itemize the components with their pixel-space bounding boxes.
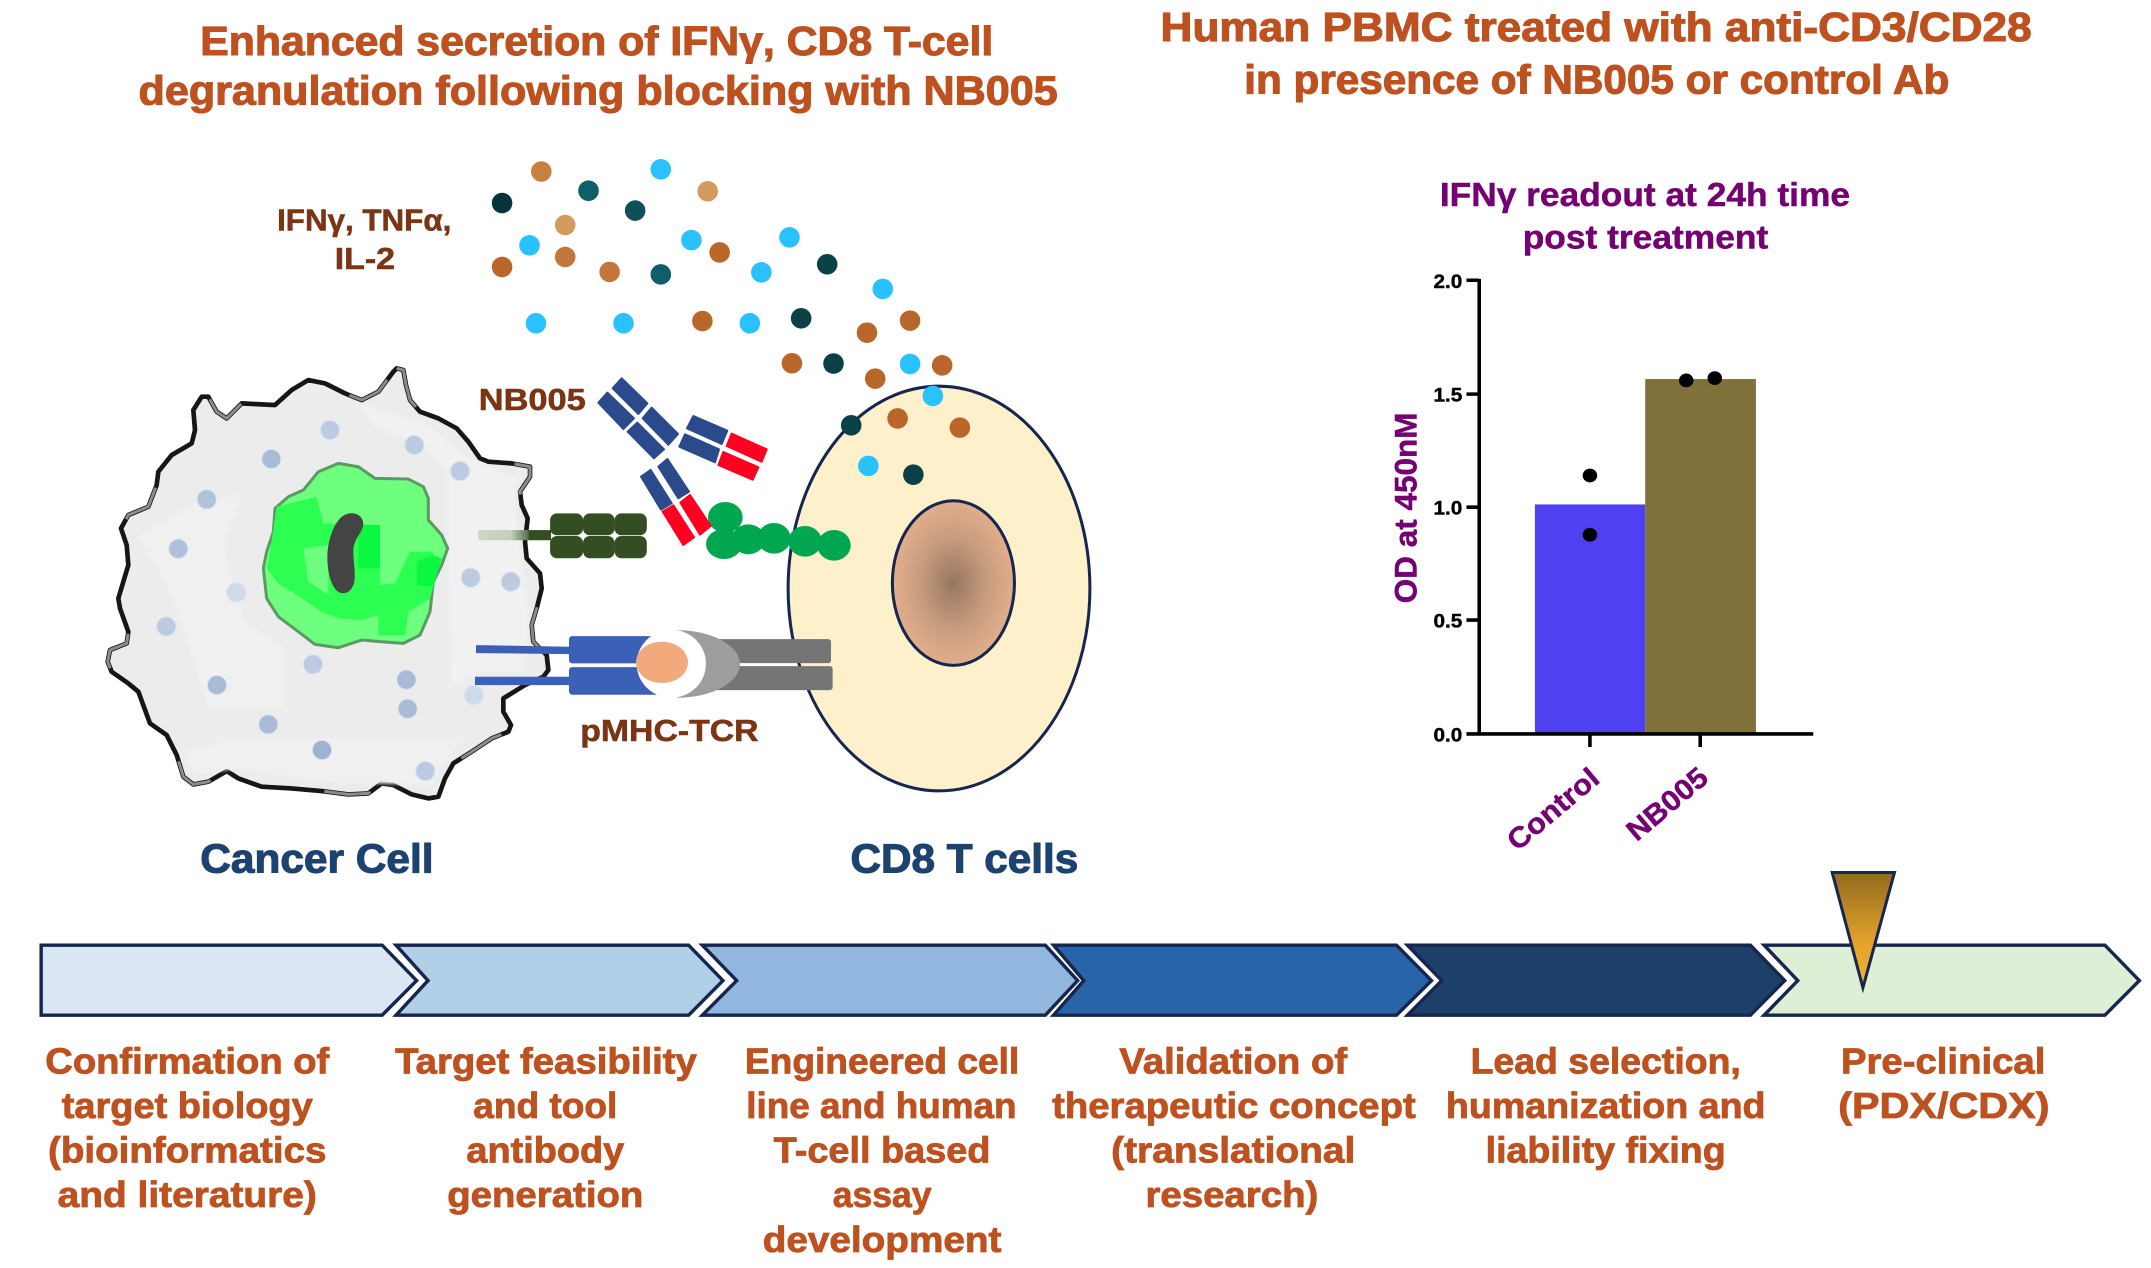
y tick labels: 1.5 (1434, 385, 1463, 406)
step 3 label (745, 1041, 1019, 1260)
step 2 label (395, 1041, 697, 1215)
icon: green receptor on T cell (706, 502, 851, 561)
step 2 label: Target feasibility (395, 1041, 697, 1081)
step 6 label: Pre-clinical (1841, 1041, 2045, 1081)
chart title: IFNγ readout at 24h time (1440, 176, 1850, 213)
nucleus (263, 463, 448, 648)
label: cytokines (277, 204, 451, 276)
bars (1535, 379, 1756, 734)
chart title (1440, 176, 1850, 255)
step 5 label: liability fixing (1486, 1131, 1726, 1171)
step 1 label: and literature) (58, 1175, 317, 1215)
y tick labels: 1.0 (1434, 498, 1462, 519)
icon: receptor on cancer cell (478, 513, 647, 558)
label: cytokines: IL-2 (335, 243, 395, 276)
step 4 label: therapeutic concept (1052, 1086, 1416, 1126)
step 1 label: (bioinformatics (48, 1131, 326, 1171)
icon: pMHC-TCR complex (475, 630, 833, 698)
step 1 label: target biology (62, 1086, 313, 1126)
y tick labels: 0.5 (1434, 612, 1463, 633)
y axis title: OD at 450nM (1387, 413, 1423, 603)
step 5 label: humanization and (1446, 1086, 1766, 1126)
cytokine particles (492, 159, 970, 485)
label: Cancer Cell: Cancer Cell (200, 835, 433, 881)
step 3 label: T-cell based (774, 1131, 990, 1171)
icon: stage marker triangle (1832, 872, 1894, 988)
y tick labels: 0.0 (1434, 725, 1462, 746)
step 4 label: (translational (1111, 1131, 1355, 1171)
step 3 label: development (763, 1220, 1002, 1260)
step 3 label: Engineered cell (745, 1041, 1019, 1081)
label: pMHC-TCR: pMHC-TCR (580, 715, 759, 748)
step 4 label: research) (1145, 1175, 1318, 1215)
title: left heading (139, 18, 1058, 113)
step 4 label: Validation of (1119, 1041, 1347, 1081)
x tick labels: Control (1501, 762, 1606, 857)
step 2 label: and tool (473, 1086, 617, 1126)
y tick labels: 2.0 (1434, 272, 1462, 293)
step 3 label: line and human (746, 1086, 1017, 1126)
label: CD8 T cells: CD8 T cells (851, 835, 1078, 881)
illustration: CD8 T cell (788, 386, 1090, 791)
step 6 label: (PDX/CDX) (1838, 1086, 2049, 1126)
label: cytokines: IFNγ, TNFα, (277, 204, 451, 237)
icon: NB005 antibody (598, 378, 767, 545)
step 1 label: Confirmation of (45, 1041, 329, 1081)
x tick labels: NB005 (1621, 761, 1715, 848)
data points (1583, 371, 1722, 542)
step 2 label: antibody (466, 1131, 624, 1171)
step 2 label: generation (447, 1175, 643, 1215)
title: right heading: in presence of NB005 or control Ab (1244, 56, 1949, 102)
step 5 label (1446, 1041, 1766, 1171)
title: right heading: Human PBMC treated with anti-CD3/CD28 (1161, 4, 2032, 50)
y tick labels (1434, 272, 1463, 746)
x tick labels (1501, 761, 1715, 857)
title: left heading: degranulation following blocking with NB005 (139, 67, 1058, 113)
vesicles (157, 420, 520, 781)
timeline: pipeline chevrons (41, 945, 2139, 1015)
label: NB005: NB005 (479, 384, 586, 417)
step 5 label: Lead selection, (1471, 1041, 1741, 1081)
title: left heading: Enhanced secretion of IFNγ, CD8 T-cell (200, 18, 993, 64)
step 4 label (1052, 1041, 1416, 1215)
step 6 label (1838, 1041, 2049, 1126)
chart title: post treatment (1523, 218, 1768, 255)
title: right heading (1161, 4, 2032, 102)
illustration: cancer cell (108, 368, 548, 798)
chart: IFNγ bar chart (1387, 176, 1850, 857)
axes (1466, 279, 1813, 747)
step 1 label (45, 1041, 329, 1215)
step 3 label: assay (833, 1175, 932, 1215)
